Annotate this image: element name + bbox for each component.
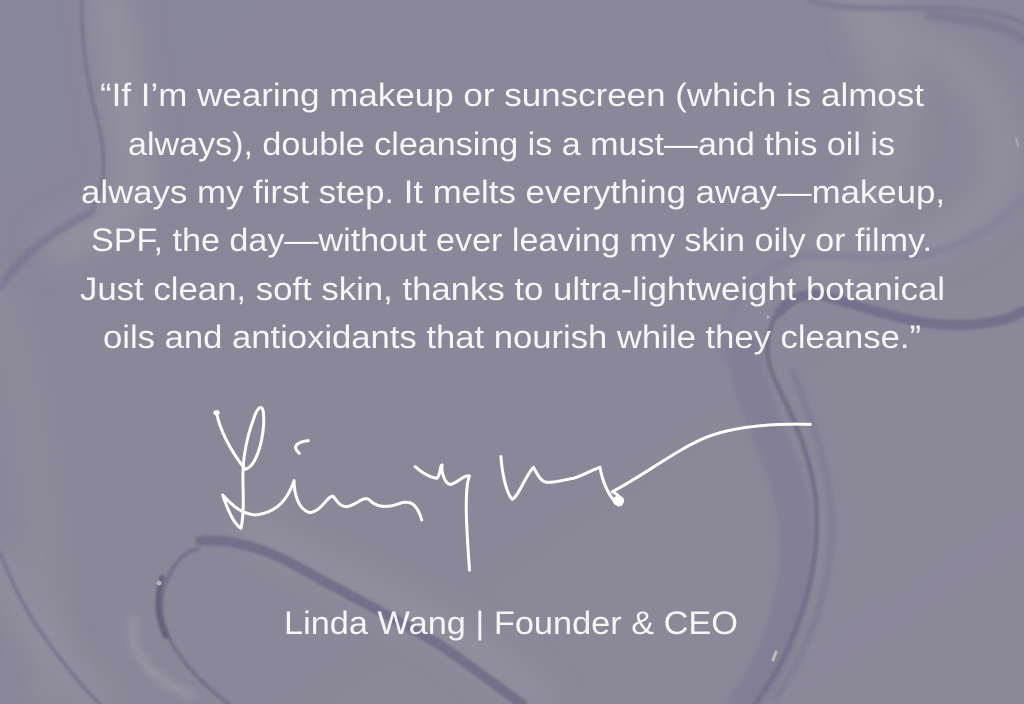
attribution: Linda Wang | Founder & CEO [284,605,738,641]
quote text: oils and antioxidants that nourish while they cleanse.” [103,319,921,355]
signature [213,408,810,570]
quote text [80,77,945,355]
quote text: always), double cleansing is a must—and this oil is [128,126,895,162]
quote text: always my first step. It melts everything away—makeup, [81,174,945,210]
quote text: SPF, the day—without ever leaving my skin oily or filmy. [91,222,932,258]
quote text: Just clean, soft skin, thanks to ultra-lightweight botanical [80,271,945,307]
quote text: “If I’m wearing makeup or sunscreen (which is almost [100,77,924,113]
